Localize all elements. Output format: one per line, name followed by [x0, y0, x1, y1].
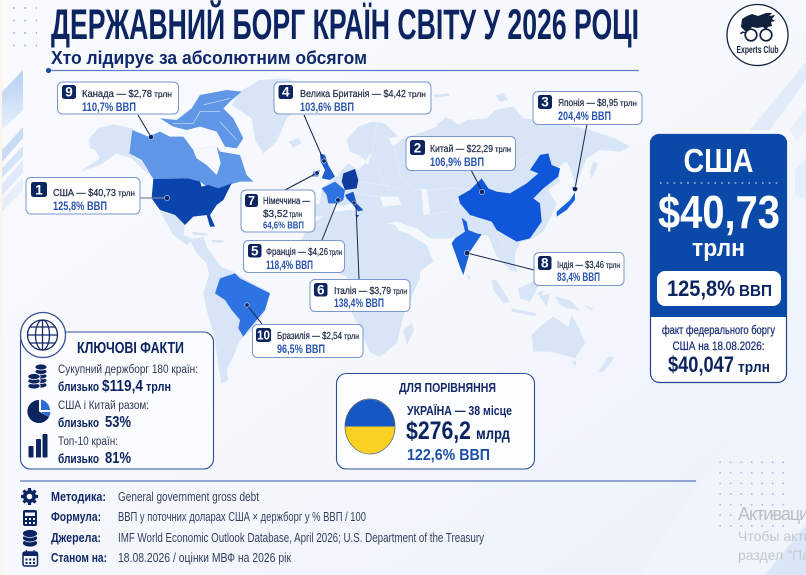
methodology: as of date	[23, 550, 291, 566]
fact 1: близько	[58, 379, 99, 394]
leader lines	[138, 115, 587, 324]
callout 7: Germany: $3,52	[263, 209, 288, 220]
callout 8: India: 8	[541, 256, 549, 270]
callout 7: Germany: Німеччина —	[263, 196, 310, 207]
callout 10: Brazil	[252, 324, 363, 358]
callout 7: Germany: 64,6% ВВП	[263, 220, 304, 232]
callout 9: Canada: Канада — $2,78	[82, 88, 152, 100]
percent of GDP pill: ВВП	[739, 283, 772, 300]
methodology: sources	[22, 530, 485, 547]
country: Canada	[129, 90, 253, 195]
fact 1	[58, 364, 198, 395]
subtitle: Хто лідирує за абсолютним обсягом	[51, 47, 367, 68]
callout 8: India: 83,4% ВВП	[557, 272, 600, 284]
logo: Experts Club: Experts Club	[736, 45, 778, 56]
country: India	[452, 218, 482, 275]
callout 6: Italy: 138,4% ВВП	[334, 298, 384, 310]
methodology: formula	[23, 510, 366, 526]
methodology: as of date: Станом на:	[51, 551, 107, 565]
federal debt note: $40,047	[668, 352, 734, 377]
callout 10: Brazil: Бразилія — $2,54	[277, 330, 342, 342]
federal debt note: факт федерального боргу	[662, 325, 775, 337]
callout 4: UK: трлн	[408, 89, 426, 99]
icon: database	[22, 530, 38, 547]
amount: $40,73	[658, 186, 780, 238]
federal debt note: США на 18.08.2026:	[672, 341, 764, 353]
callout 4: UK: Велика Британія — $4,42	[300, 88, 406, 100]
world map	[80, 78, 630, 383]
Ukraine amount: $276,2	[406, 417, 471, 445]
callout 3: Japan: Японія — $8,95	[558, 97, 618, 109]
fact 2	[58, 400, 149, 431]
heading: ДЛЯ ПОРІВНЯННЯ	[399, 380, 496, 395]
fact 1: $119,4	[102, 378, 143, 395]
Ukraine amount: млрд	[476, 426, 510, 443]
callout 8: India: Індія — $3,46	[557, 259, 604, 271]
federal debt note: трлн	[738, 359, 770, 376]
country: Germany	[342, 169, 358, 190]
callout 6: Italy: 6	[317, 282, 325, 298]
watermark: OS activation notice	[738, 504, 806, 563]
callout 10: Brazil: 10	[257, 328, 270, 342]
icon: pie chart	[27, 400, 50, 423]
icon: coins	[28, 364, 47, 389]
land: North America	[80, 78, 308, 245]
callout 4: UK: 4	[282, 84, 290, 100]
methodology: formula: Формула:	[51, 510, 101, 524]
Ukraine percent of GDP: 122,6% ВВП	[407, 447, 490, 464]
fact 3: 81%	[105, 450, 131, 467]
seas and borders	[345, 123, 533, 252]
country: Italy	[345, 192, 363, 218]
panel: key facts	[20, 312, 214, 469]
callout 2: China: 2	[414, 140, 421, 156]
callout 1: USA: США — $40,73	[53, 187, 116, 199]
icon: calculator	[23, 510, 37, 526]
panel: USA headline	[650, 134, 787, 382]
callout 8: India: трлн	[606, 260, 620, 270]
Ukraine rank: УКРАЇНА — 38 місце	[407, 403, 512, 418]
icon: globe	[20, 312, 66, 358]
country: Japan	[557, 187, 578, 217]
fact 3: близько	[58, 451, 99, 466]
country: Brazil	[215, 273, 270, 337]
fact 2: США і Китай разом:	[58, 400, 149, 412]
fact 2: близько	[58, 415, 99, 430]
methodology: method: General government gross debt	[118, 490, 259, 504]
callout 3: Japan	[533, 92, 642, 124]
fact 1: трлн	[146, 379, 171, 394]
methodology: sources: IMF World Economic Outlook Database, April 2026; U.S. Department of the Treasury	[118, 531, 485, 545]
fact 3: Топ-10 країн:	[58, 436, 118, 448]
callout 2: China: Китай — $22,29	[430, 143, 493, 155]
percent of GDP pill: 125,8%	[667, 276, 735, 301]
land: Eurasia	[307, 93, 630, 275]
callout 6: Italy: трлн	[393, 286, 407, 296]
callout 1: USA	[26, 178, 140, 214]
country: France	[322, 182, 345, 203]
methodology: as of date: 18.08.2026 / оцінки МВФ на 2026 рік	[118, 551, 291, 565]
callout 10: Brazil: 96,5% ВВП	[277, 344, 325, 356]
country name: США	[684, 142, 754, 179]
country: UK	[320, 153, 335, 180]
methodology: method	[21, 488, 259, 505]
callout 1: USA: 1	[35, 182, 43, 198]
panel: comparison with Ukraine	[336, 374, 534, 469]
callout 7: Germany	[241, 190, 315, 232]
fact 2: 53%	[105, 414, 131, 431]
callout 2: China	[406, 136, 516, 170]
icon: gear	[21, 488, 38, 505]
callout 10: Brazil: трлн	[344, 331, 359, 341]
callout 5: France: Франція — $4,26	[266, 246, 328, 258]
fact 3	[58, 436, 131, 467]
callout 9: Canada: 9	[65, 84, 73, 100]
callout 6: Italy	[310, 280, 410, 312]
country: Ireland	[312, 170, 320, 177]
title rule	[46, 68, 639, 73]
land: SE Asia and Oceania	[467, 230, 613, 372]
methodology: sources: Джерела:	[51, 531, 101, 545]
callout 5: France: 118,4% ВВП	[266, 260, 313, 272]
icon: Ukrainian flag	[345, 399, 395, 454]
callout 5: France: 5	[251, 244, 259, 258]
unit: трлн	[692, 235, 745, 262]
country: USA	[152, 178, 232, 227]
callout 5: France	[244, 240, 344, 272]
percent of GDP pill	[657, 271, 781, 306]
icon: calendar	[23, 550, 38, 566]
callout 2: China: трлн	[495, 144, 511, 154]
callout 3: Japan: 3	[541, 94, 549, 110]
methodology: method: Методика:	[51, 490, 106, 504]
land: Africa	[298, 210, 420, 357]
land: South America	[190, 237, 270, 383]
callout 1: USA: 125,8% ВВП	[53, 201, 107, 213]
callout 9: Canada: 110,7% ВВП	[82, 102, 136, 114]
callout 7: Germany: 7	[248, 194, 255, 208]
callout 2: China: 106,9% ВВП	[430, 157, 484, 169]
callout 4: UK	[274, 82, 431, 114]
country: China	[458, 153, 560, 242]
federal debt note	[662, 325, 775, 377]
callout 6: Italy: Італія — $3,79	[334, 285, 391, 297]
fact 1: Сукупний держборг 180 країн:	[58, 364, 198, 376]
callout 5: France: трлн	[329, 247, 342, 257]
callout 3: Japan: трлн	[620, 98, 637, 108]
methodology: formula: ВВП у поточних доларах США × держборг у % ВВП / 100	[118, 510, 366, 524]
callout 1: USA: трлн	[118, 188, 135, 198]
callout 7: Germany: трлн	[289, 209, 302, 219]
logo: Experts Club	[727, 4, 788, 66]
callout 4: UK: 103,6% ВВП	[300, 102, 354, 114]
callout 9: Canada: трлн	[154, 89, 172, 99]
countries: Europe and Asia	[312, 153, 578, 275]
callout 3: Japan: 204,4% ВВП	[558, 111, 611, 123]
icon: bar chart	[28, 434, 48, 458]
callout 9: Canada	[58, 82, 178, 114]
callout 8: India	[534, 252, 624, 286]
heading: КЛЮЧОВІ ФАКТИ	[77, 340, 184, 357]
